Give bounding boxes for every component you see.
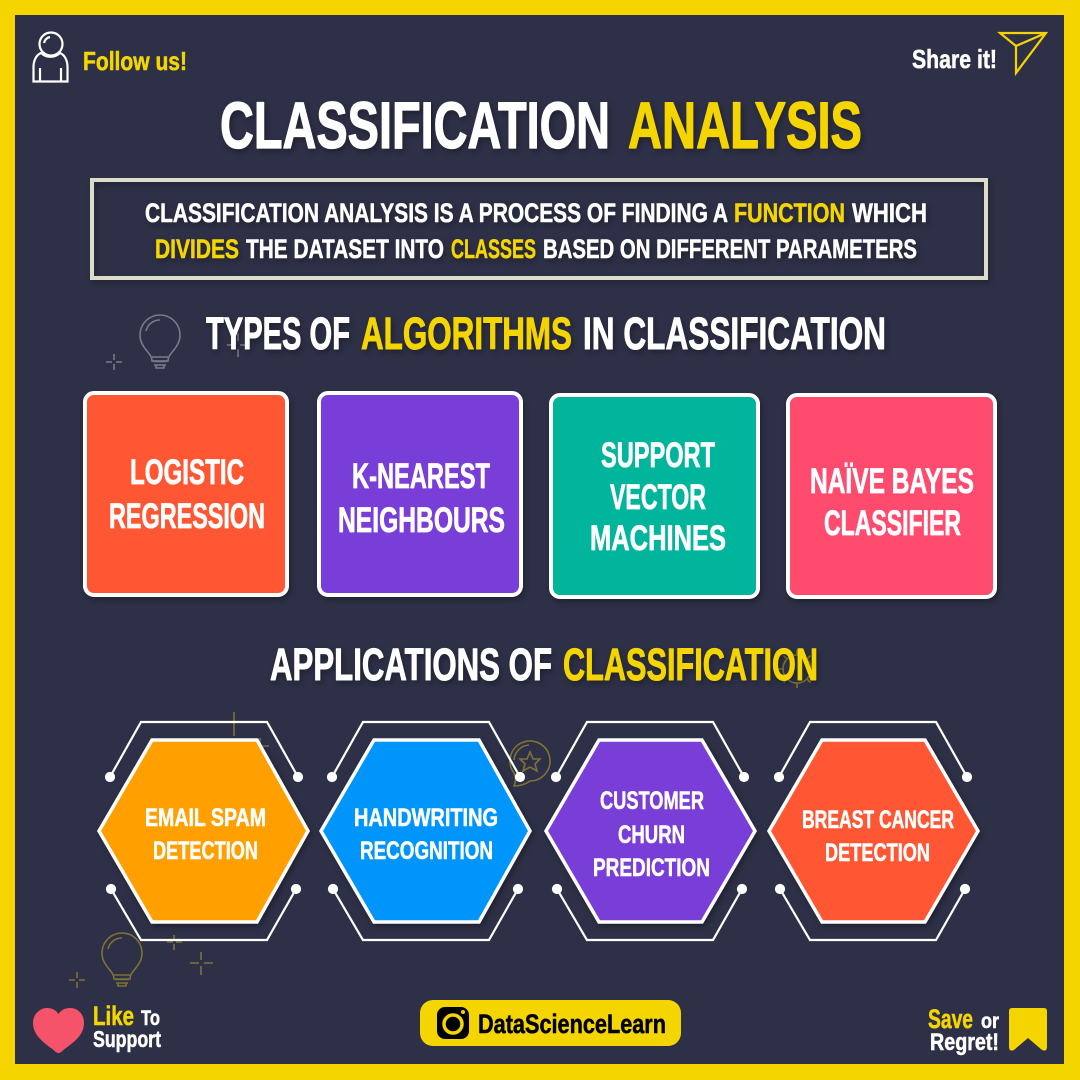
like to support (33, 1001, 161, 1053)
icon: person (34, 32, 68, 82)
panel: logistic regression: LOGISTIC (130, 453, 244, 492)
panel: naive bayes classifier: CLASSIFIER (824, 504, 961, 543)
panel: customer churn prediction: CUSTOMER (600, 787, 704, 815)
definition box (92, 180, 986, 278)
icon: decorative light bulb yellow (69, 933, 213, 988)
panel: naive bayes classifier (788, 395, 995, 597)
label: follow us: Follow us! (83, 46, 187, 76)
label: save or regret (928, 1004, 999, 1056)
save or regret (928, 1004, 1047, 1056)
label: like to support (93, 1001, 161, 1052)
share it (912, 33, 1046, 74)
definition text: CLASSIFICATION ANALYSIS IS A PROCESS OF FINDING A (145, 198, 728, 228)
heading: applications of classification: CLASSIFICATION (563, 639, 818, 690)
panel: email spam detection: EMAIL SPAM (145, 804, 266, 832)
panel: support vector machines: VECTOR (610, 478, 706, 517)
title: CLASSIFICATION (220, 88, 610, 162)
icon: heart (33, 1008, 84, 1053)
definition text: DIVIDES (155, 234, 239, 264)
icon: decorative star speech bubble (510, 741, 550, 786)
panel: breast cancer detection (769, 722, 978, 940)
panel: customer churn prediction: PREDICTION (593, 854, 710, 882)
definition text (145, 198, 927, 264)
title: ANALYSIS (628, 88, 862, 162)
instagram handle pill (420, 1000, 681, 1046)
panel: logistic regression (85, 393, 287, 595)
heading: types of algorithms (206, 308, 886, 359)
heading: types of algorithms: ALGORITHMS (361, 308, 572, 359)
label: save or regret: Regret! (930, 1029, 999, 1056)
panel: k-nearest neighbours: K-NEAREST (352, 457, 490, 496)
panel: email spam detection: DETECTION (153, 837, 258, 865)
definition text: CLASSES (451, 234, 536, 264)
label: handle: DataScienceLearn (478, 1009, 666, 1039)
panel: handwriting recognition: HANDWRITING (354, 804, 498, 832)
label: save or regret: or (981, 1010, 999, 1033)
panel: email spam detection (99, 722, 308, 940)
icon: bookmark (1009, 1008, 1047, 1051)
definition text: THE DATASET INTO (246, 234, 444, 264)
label: like to support: Like (93, 1001, 134, 1031)
definition text: BASED ON DIFFERENT PARAMETERS (543, 234, 917, 264)
icon: decorative light bulb grey (106, 315, 247, 370)
definition text: WHICH (852, 198, 927, 228)
panel: k-nearest neighbours: NEIGHBOURS (338, 501, 505, 540)
icon: paper plane (1000, 33, 1046, 73)
label: share it: Share it! (912, 44, 997, 74)
panel: breast cancer detection: DETECTION (825, 839, 930, 867)
heading: types of algorithms: IN CLASSIFICATION (583, 308, 886, 359)
panel: support vector machines: SUPPORT (601, 436, 715, 475)
hexagon outline brackets (106, 722, 302, 940)
panel: breast cancer detection: BREAST CANCER (802, 806, 954, 834)
follow us (34, 32, 187, 82)
panel: handwriting recognition (321, 722, 530, 940)
label: like to support: Support (93, 1026, 161, 1052)
icon: instagram (437, 1007, 469, 1039)
panel: naive bayes classifier: NAÏVE BAYES (810, 462, 974, 501)
panel: handwriting recognition: RECOGNITION (360, 837, 493, 865)
label: like to support: To (141, 1007, 160, 1030)
heading: applications of classification: APPLICATIONS OF (270, 639, 552, 690)
label: save or regret: Save (928, 1004, 973, 1034)
panel: logistic regression: REGRESSION (109, 497, 265, 536)
panel: customer churn prediction (546, 722, 755, 940)
hexagon outline brackets (775, 722, 971, 940)
icon: decorative gear (778, 650, 816, 688)
panel: customer churn prediction: CHURN (618, 821, 685, 849)
definition text: FUNCTION (734, 198, 845, 228)
hexagon outline brackets (552, 722, 748, 940)
icon: decorative sparkle (234, 712, 269, 746)
panel: support vector machines: MACHINES (590, 519, 726, 558)
hexagon outline brackets (328, 722, 524, 940)
panel: support vector machines (551, 395, 758, 597)
heading: types of algorithms: TYPES OF (206, 308, 350, 359)
panel: k-nearest neighbours (319, 393, 521, 595)
